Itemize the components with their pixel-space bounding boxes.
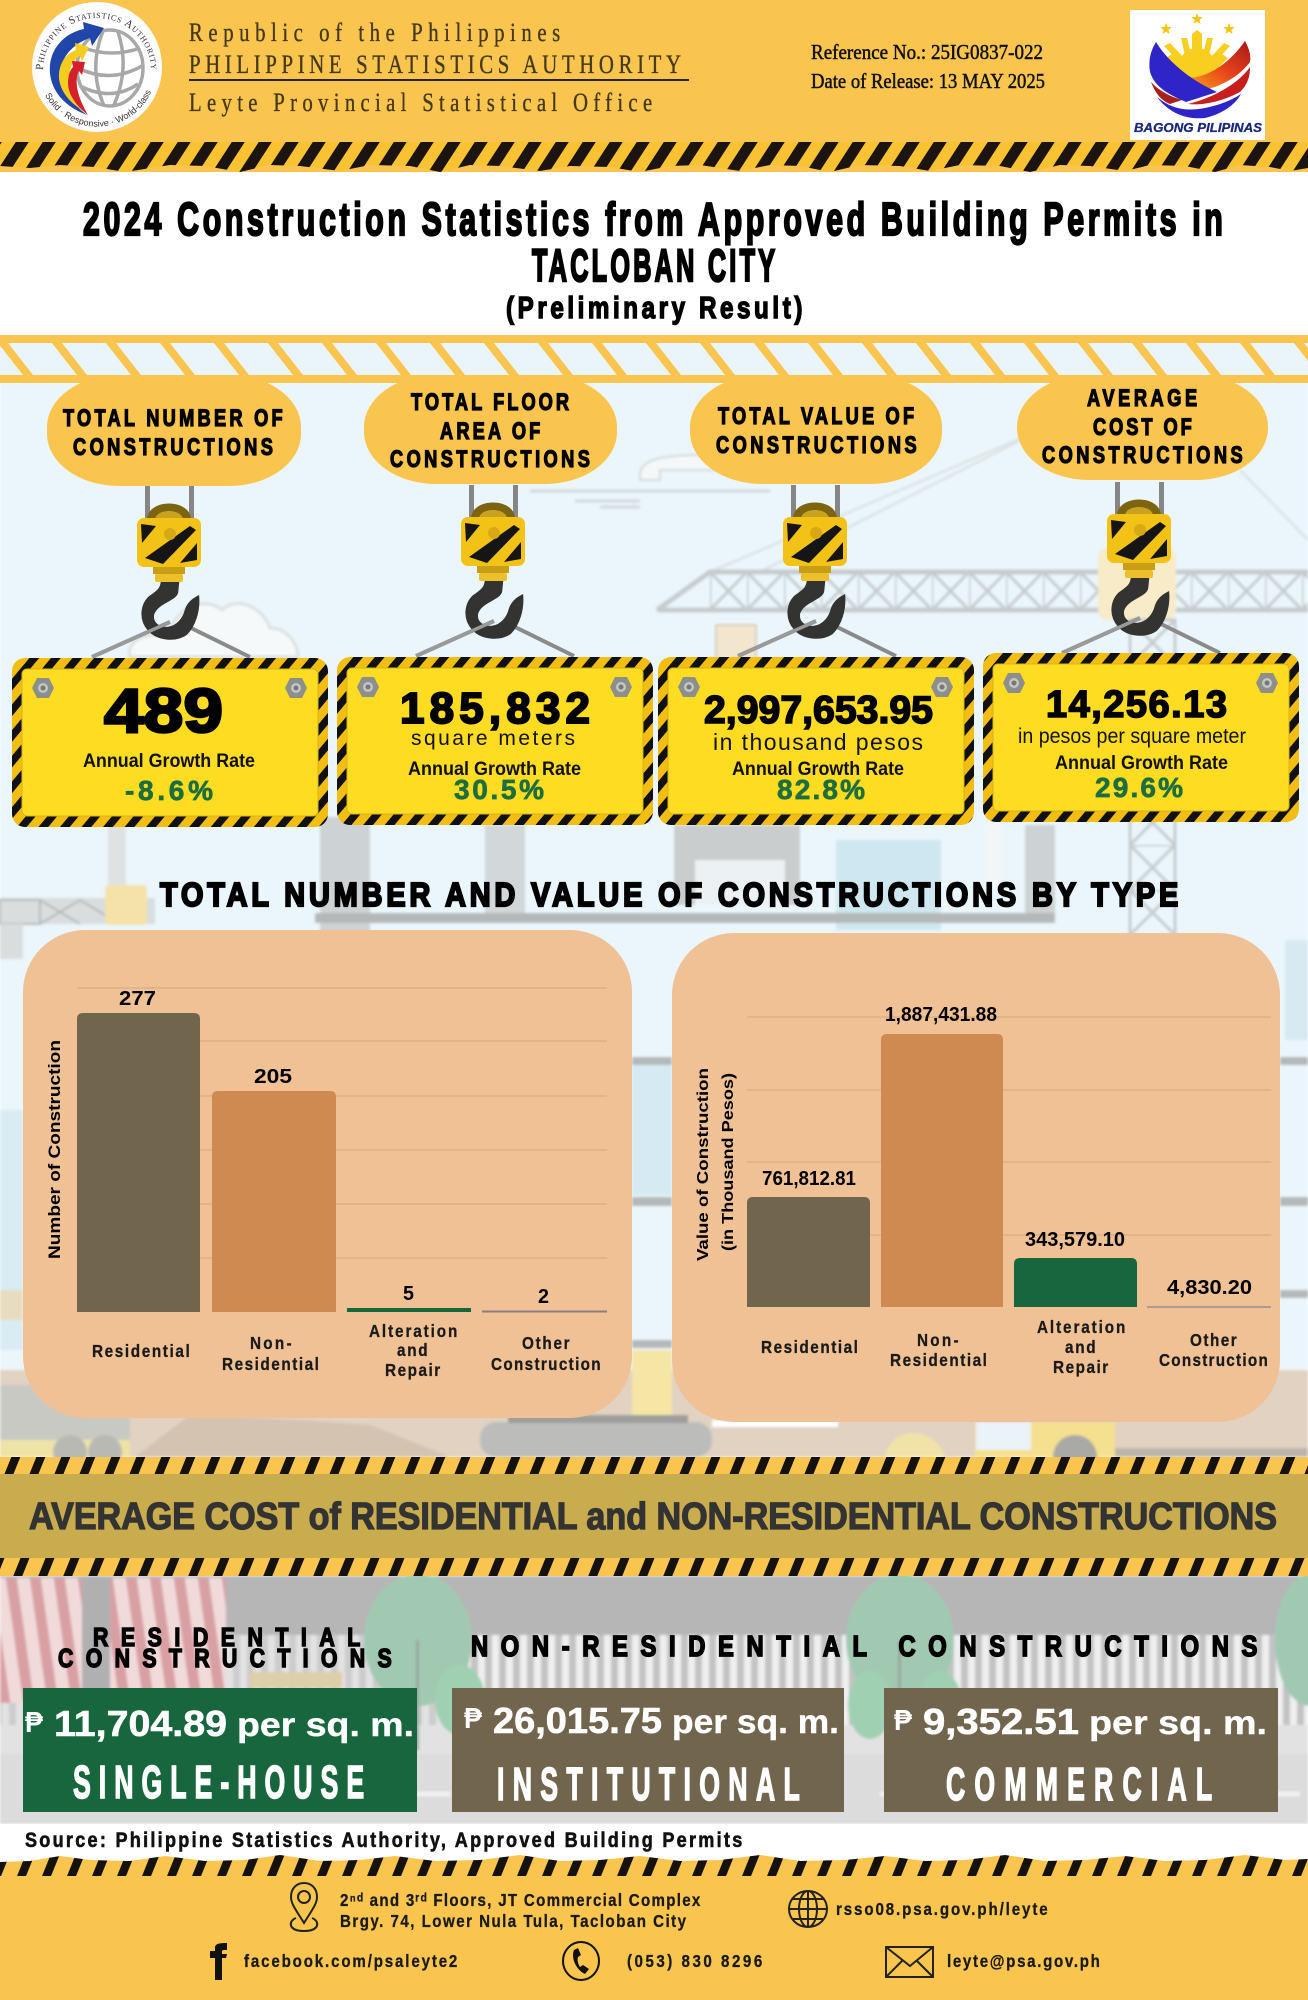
reference number and release date: Reference No.: 25IG0837-022 (811, 40, 1043, 64)
pill label: AREA OF (440, 418, 540, 445)
sign: square meters (411, 727, 575, 750)
card: institutional: ₱ (464, 1703, 483, 1735)
icon: PSA logo: Solid · Responsive · World-class (46, 90, 151, 127)
facebook handle: facebook.com/psaleyte2 (244, 1951, 457, 1971)
x axis labels: Residential (890, 1350, 987, 1370)
card: single-house: per sq. m. (237, 1706, 414, 1743)
icon: phone (563, 1942, 599, 1980)
hook (416, 485, 574, 656)
title: TACLOBAN CITY (532, 240, 775, 291)
sign: 489 (104, 677, 223, 746)
email: leyte@psa.gov.ph (947, 1951, 1100, 1971)
sign: 82.8% (777, 774, 865, 805)
agency name text block: Leyte Provincial Statistical Office (189, 89, 652, 118)
agency name text block: Republic of the Philippines (189, 19, 560, 48)
sign (12, 658, 328, 827)
icon: globe (789, 1891, 827, 1927)
hazard tape: below banner (0, 1558, 1308, 1576)
panel: total floor area (337, 375, 653, 825)
agency name text block (189, 19, 689, 118)
pill label: COST OF (1093, 414, 1192, 441)
pill label (690, 375, 942, 484)
phone number: (053) 830 8296 (627, 1951, 762, 1971)
footer (0, 1855, 1308, 2000)
sign: Annual Growth Rate (408, 759, 581, 780)
background illustration: construction site (0, 383, 1308, 1479)
sign: 29.6% (1095, 772, 1183, 803)
section: average cost background (0, 1574, 1308, 1824)
hook (738, 485, 896, 656)
y axis title: (in Thousand Pesos) (720, 1073, 737, 1251)
icon: PSA logo (32, 2, 162, 132)
x axis labels: Other (522, 1333, 570, 1353)
x axis labels (92, 1321, 601, 1380)
sign: Annual Growth Rate (732, 759, 904, 780)
x axis labels: Residential (761, 1337, 858, 1357)
sign: 30.5% (454, 774, 544, 805)
x axis labels: Non- (250, 1333, 292, 1353)
card: single-house: ₱ (25, 1707, 44, 1739)
title: 2024 Construction Statistics from Approved Building Permits in (83, 195, 1223, 246)
heading: residential constructions: CONSTRUCTIONS (58, 1644, 392, 1674)
pill label: CONSTRUCTIONS (73, 434, 273, 461)
y axis title (695, 1068, 737, 1261)
pill label: CONSTRUCTIONS (716, 432, 917, 459)
x axis labels: Repair (385, 1360, 441, 1380)
x axis labels: and (397, 1340, 428, 1360)
sign (337, 657, 653, 825)
value labels: 343,579.10 (1025, 1229, 1125, 1251)
heading: constructions by type: TOTAL NUMBER AND VALUE OF CONSTRUCTIONS BY TYPE (160, 876, 1178, 914)
address: Brgy. 74, Lower Nula Tula, Tacloban City (340, 1911, 687, 1931)
icon: facebook (210, 1943, 227, 1980)
reference number and release date (811, 40, 1045, 93)
y axis title: Value of Construction (695, 1068, 712, 1261)
pill label: TOTAL NUMBER OF (63, 405, 283, 432)
card: commercial: ₱ (894, 1705, 913, 1737)
sign (658, 657, 974, 825)
icon: Bagong Pilipinas logo (1130, 10, 1265, 140)
card: institutional: INSTITUTIONAL (497, 1758, 800, 1810)
source note: Source: Philippine Statistics Authority, Approved Building Permits (25, 1829, 742, 1852)
address (340, 1890, 701, 1931)
y axis title: Number of Construction (45, 1040, 64, 1259)
sign: Annual Growth Rate (83, 751, 255, 772)
title (83, 195, 1223, 325)
card: commercial: 9,352.51 (923, 1701, 1079, 1742)
x axis labels: Construction (1159, 1350, 1268, 1370)
x axis labels (761, 1317, 1268, 1377)
card: single-house: 11,704.89 (54, 1703, 227, 1744)
sign: in thousand pesos (713, 729, 923, 755)
value labels: 205 (254, 1066, 292, 1088)
panel: total number of constructions (12, 375, 328, 827)
sign (983, 653, 1299, 822)
pill label: TOTAL VALUE OF (718, 403, 914, 430)
agency name text block: PHILIPPINE STATISTICS AUTHORITY (189, 51, 681, 80)
source note (0, 1824, 1308, 1864)
crane rail band (0, 335, 1308, 383)
x axis labels: Repair (1053, 1357, 1109, 1377)
value labels (119, 988, 549, 1308)
card: institutional: 26,015.75 (493, 1700, 662, 1741)
bar chart: number of construction (23, 930, 632, 1418)
x axis labels: Alteration (369, 1321, 457, 1341)
banner: average cost heading (0, 1457, 1308, 1576)
header band (0, 0, 1308, 172)
value labels: 277 (119, 988, 156, 1010)
card: commercial: COMMERCIAL (946, 1758, 1212, 1810)
value labels (762, 1004, 1252, 1299)
panel: average cost (983, 375, 1299, 822)
x axis labels: Construction (491, 1354, 601, 1374)
hazard tape: above banner (0, 1457, 1308, 1474)
sign: in pesos per square meter (1018, 725, 1246, 748)
pill label: TOTAL FLOOR (411, 389, 569, 416)
heading: non-residential constructions: NON-RESIDENTIAL CONSTRUCTIONS (471, 1630, 1257, 1663)
address: 2ⁿᵈ and 3ʳᵈ Floors, JT Commercial Complex (340, 1890, 701, 1910)
card: institutional (452, 1688, 844, 1812)
x axis labels: Non- (917, 1330, 959, 1350)
value labels: 2 (538, 1286, 549, 1308)
x axis labels: and (1065, 1337, 1096, 1357)
pill label (364, 375, 617, 484)
hazard tape: bottom (0, 1855, 1308, 1876)
title: (Preliminary Result) (506, 290, 802, 325)
value labels: 5 (403, 1283, 414, 1305)
card: institutional: per sq. m. (672, 1703, 839, 1740)
heading: residential constructions (58, 1623, 392, 1674)
panel: total value (658, 375, 974, 825)
icon: Bagong Pilipinas logo: BAGONG PILIPINAS (1134, 121, 1263, 135)
hazard tape: top (0, 142, 1308, 172)
hook (1062, 482, 1220, 653)
icon: PSA logo: Philippine Statistics Authority (36, 12, 156, 70)
sign: Annual Growth Rate (1055, 753, 1228, 774)
x axis labels: Other (1190, 1330, 1237, 1350)
x axis labels: Alteration (1037, 1317, 1125, 1337)
card: commercial: per sq. m. (1089, 1704, 1267, 1741)
bars (747, 1034, 1271, 1308)
card: single-house (23, 1688, 417, 1812)
heading: residential constructions: RESIDENTIAL (93, 1623, 360, 1653)
card: single-house: SINGLE-HOUSE (73, 1756, 364, 1808)
pill label: AVERAGE (1087, 385, 1197, 412)
pill label: CONSTRUCTIONS (1042, 442, 1243, 469)
value labels: 4,830.20 (1167, 1277, 1252, 1299)
website: rsso08.psa.gov.ph/leyte (836, 1899, 1048, 1919)
pill label (1017, 375, 1268, 480)
x axis labels: Residential (222, 1354, 319, 1374)
sign: 185,832 (400, 684, 590, 733)
bars (77, 1013, 607, 1312)
x axis labels: Residential (92, 1341, 190, 1361)
sign: 14,256.13 (1046, 684, 1227, 726)
pill label: CONSTRUCTIONS (390, 446, 590, 473)
hook (92, 486, 250, 657)
sign: 2,997,653.95 (704, 689, 933, 732)
value labels: 1,887,431.88 (885, 1004, 997, 1026)
icon: envelope (886, 1947, 933, 1977)
sign: -8.6% (125, 775, 213, 806)
icon: location pin (291, 1883, 317, 1931)
pill label (47, 375, 301, 486)
bar chart: value of construction (672, 933, 1280, 1422)
value labels: 761,812.81 (762, 1168, 856, 1190)
card: commercial (884, 1688, 1278, 1812)
reference number and release date: Date of Release: 13 MAY 2025 (811, 69, 1045, 93)
